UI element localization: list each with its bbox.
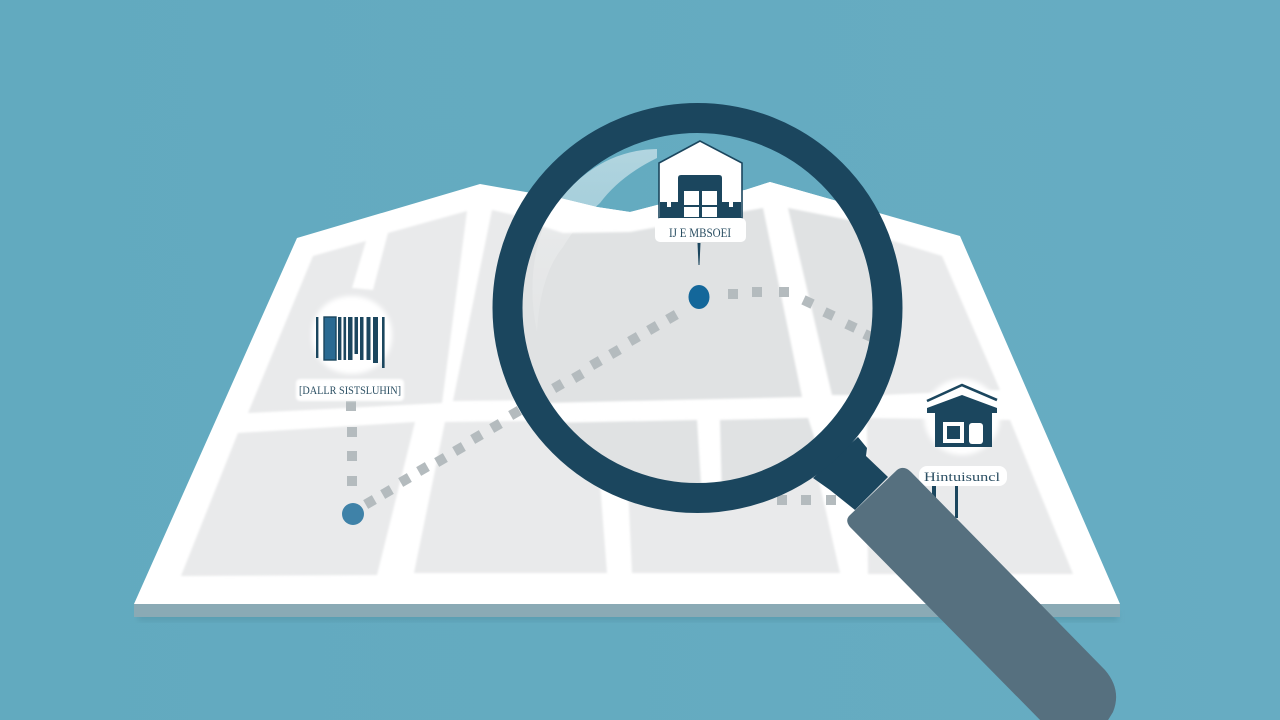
home window — [943, 422, 964, 443]
map sheet — [134, 182, 1120, 604]
marker: hub dot — [688, 285, 710, 309]
panel: magnified map inside lens — [522, 149, 872, 483]
home body — [927, 395, 997, 447]
home pin lines — [932, 486, 958, 518]
handle — [847, 468, 1116, 720]
icon: warehouse with label — [655, 141, 746, 265]
barcode label: [DALLR SISTSLUHIN] — [299, 383, 401, 397]
warehouse pin — [698, 243, 700, 265]
lens map sheet — [543, 182, 849, 483]
warehouse window — [684, 191, 717, 217]
marker: origin dot — [342, 503, 364, 525]
route: dotted path — [346, 287, 876, 509]
home roof line — [927, 385, 997, 401]
lens glare — [542, 149, 657, 233]
home backing — [924, 379, 1000, 455]
warehouse base and door — [660, 175, 741, 218]
map thickness shadow — [134, 603, 1120, 621]
lens ring — [508, 118, 888, 498]
barcode backing — [312, 296, 392, 374]
map blocks — [181, 207, 1073, 576]
illustration: supply chain map under magnifying glass — [134, 103, 1120, 720]
warehouse label: IJ E MBSOEI — [669, 225, 731, 240]
icon: home with label — [919, 379, 1007, 518]
home door — [969, 423, 983, 444]
panel: map — [134, 182, 1120, 621]
lens blocks — [522, 208, 872, 483]
icon: barcode with label — [296, 296, 404, 401]
neck — [813, 437, 888, 510]
icon: magnifying glass — [508, 118, 1116, 720]
home label: Hintuisuncl — [924, 469, 1000, 484]
barcode bars — [316, 317, 385, 368]
warehouse outline — [659, 141, 742, 218]
